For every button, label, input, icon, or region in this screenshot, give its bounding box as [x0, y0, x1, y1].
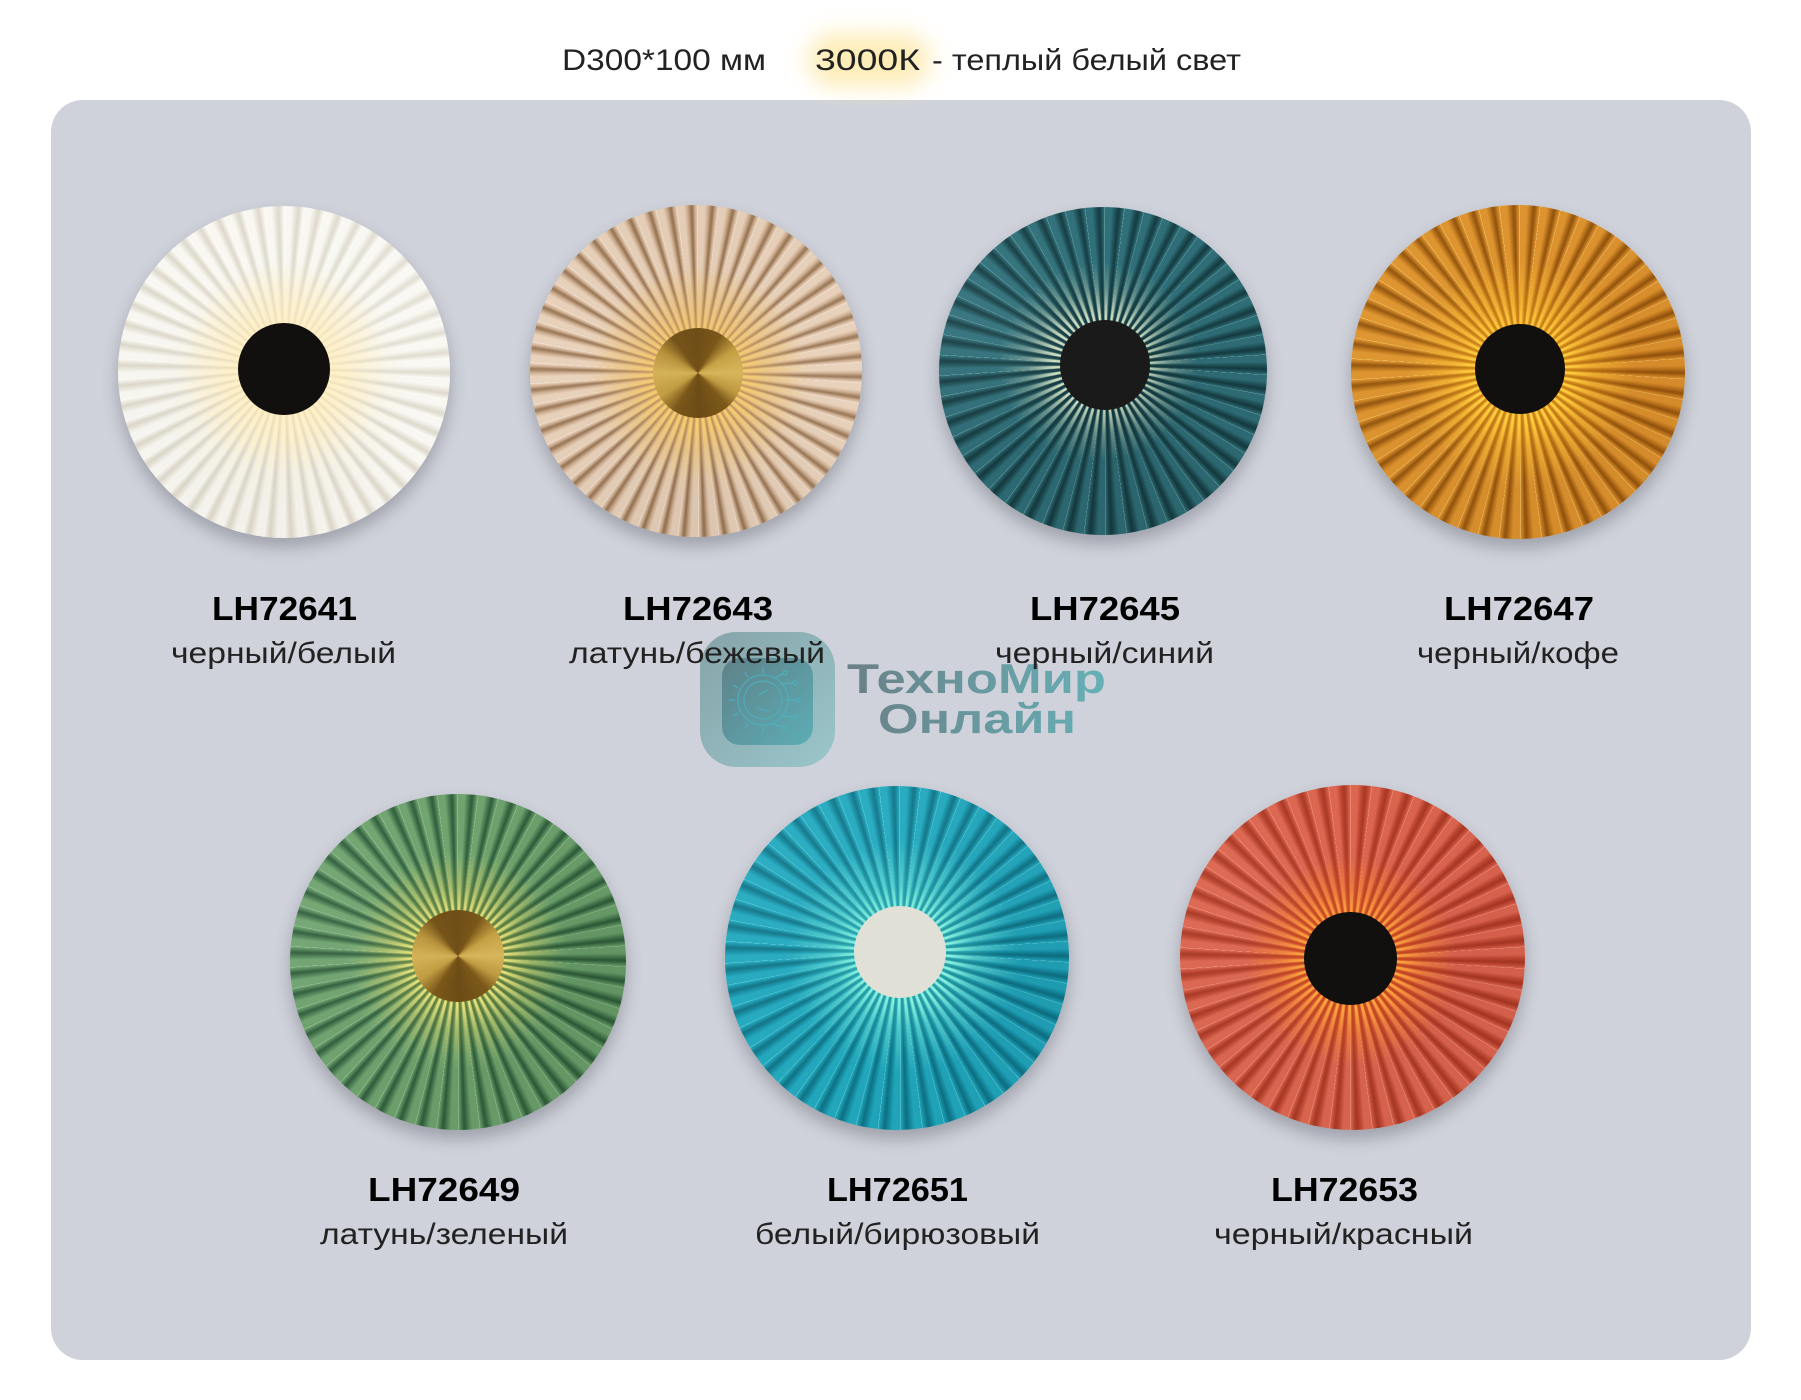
model: LH72653 — [1271, 1171, 1418, 1208]
color: черный/синий — [995, 637, 1214, 670]
caption: LH72645 — [995, 590, 1214, 670]
center disc: black — [1060, 320, 1150, 410]
lamp: LH72647 coffee — [1351, 205, 1685, 539]
watermark logo — [700, 632, 1106, 767]
caption: LH72649 — [320, 1171, 568, 1251]
center disc: black — [238, 323, 330, 415]
lamp: LH72651 turquoise — [725, 786, 1069, 1130]
icon: gear with circuit — [729, 667, 800, 733]
color: латунь/зеленый — [320, 1218, 568, 1251]
color: черный/белый — [171, 637, 396, 670]
logo inner square — [722, 658, 813, 745]
center disc: black — [1304, 912, 1396, 1004]
caption: LH72651 — [755, 1171, 1040, 1251]
lamp: LH72643 beige — [530, 205, 862, 537]
center disc: brass — [653, 328, 743, 418]
size text: D300*100 мм — [562, 44, 766, 77]
model: LH72643 — [623, 590, 773, 627]
lamp: LH72653 red — [1180, 785, 1524, 1130]
center disc: black — [1475, 324, 1565, 414]
model: LH72651 — [827, 1171, 968, 1208]
center disc: brass — [412, 910, 504, 1002]
header: specs — [562, 44, 1241, 77]
logo text — [847, 655, 1106, 742]
model: LH72645 — [1030, 590, 1180, 627]
color temperature: 3000К — [815, 44, 921, 77]
light description: - теплый белый свет — [932, 44, 1241, 77]
color: черный/кофе — [1417, 637, 1619, 670]
color: белый/бирюзовый — [755, 1218, 1040, 1251]
caption: LH72641 — [171, 590, 396, 670]
warm glow behind 3000K — [808, 34, 930, 86]
lamp: LH72649 green — [290, 794, 626, 1130]
color: черный/красный — [1214, 1218, 1473, 1251]
caption: LH72647 — [1417, 590, 1619, 670]
caption: LH72653 — [1214, 1171, 1473, 1251]
logo line 1: ТехноМир — [847, 655, 1106, 702]
center disc: white — [854, 906, 946, 998]
lamp: LH72645 dark blue-green — [939, 207, 1267, 535]
logo outer square — [700, 632, 835, 767]
model: LH72647 — [1444, 590, 1594, 627]
caption: LH72643 — [569, 590, 825, 670]
color: латунь/бежевый — [569, 637, 825, 670]
model: LH72649 — [368, 1171, 520, 1208]
logo line 2: Онлайн — [878, 695, 1076, 742]
lamp: LH72641 white — [118, 206, 450, 538]
model: LH72641 — [212, 590, 357, 627]
